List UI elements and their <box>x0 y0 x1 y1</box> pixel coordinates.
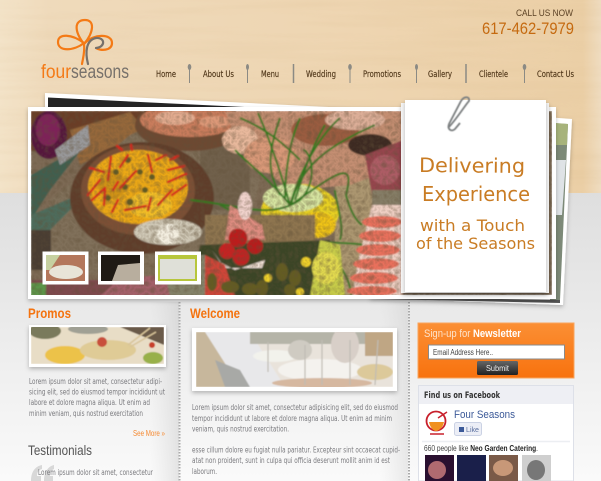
card slogan: Delivering <box>419 153 525 178</box>
panel: welcome <box>190 305 400 476</box>
welcome photo <box>192 327 397 391</box>
welcome text: Lorem ipsum dolor sit amet, consectetur adipisicing elit, sed do eiusmod <box>192 402 398 412</box>
shrimp bowl <box>134 111 236 152</box>
note card <box>401 97 549 293</box>
navigation menu: Home <box>156 69 176 79</box>
welcome text: esse cillum dolore eu fugiat nulla pariatur. Excepteur sint occaecat cupid- <box>192 444 400 454</box>
panel: facebook <box>418 386 574 481</box>
panel: promos <box>28 305 166 438</box>
burlap and table <box>31 111 144 152</box>
phone contact <box>482 8 574 38</box>
email input <box>428 345 564 359</box>
panel: testimonials <box>28 442 153 481</box>
navigation menu: Clientele <box>479 69 508 79</box>
shrimp platter <box>225 111 402 190</box>
card slogan <box>416 153 535 253</box>
promo photo <box>29 323 166 367</box>
welcome text <box>192 402 400 476</box>
navigation menu: Contact Us <box>537 69 574 79</box>
navigation menu: Promotions <box>363 69 401 79</box>
flowers and leaves <box>31 111 67 159</box>
promo text <box>29 376 166 418</box>
welcome text: veniam, quis nostrud exercitation. <box>192 424 289 434</box>
promo text: labore et dolore magna aliqua. Ut enim ad <box>29 397 150 407</box>
card slogan: with a Touch <box>420 216 525 235</box>
card slogan: of the Seasons <box>416 234 535 253</box>
brand name: four <box>41 62 72 83</box>
card slogan: Experience <box>422 182 530 206</box>
see more link: See More » <box>133 428 165 438</box>
welcome text: laborum. <box>192 466 217 476</box>
heading: welcome: Welcome <box>190 305 240 321</box>
testimonial text: Lorem ipsum dolor sit amet, consectetur <box>38 467 153 477</box>
like button: Like <box>466 425 479 434</box>
facebook heading: Find us on Facebook <box>424 390 500 400</box>
promo text: Lorem ipsum dolor sit amet, consectetur adipi- <box>29 376 162 386</box>
navigation menu: Gallery <box>428 69 452 79</box>
olive and mango plate <box>70 142 214 254</box>
navigation menu: Wedding <box>306 69 336 79</box>
promo text: sicing elit, sed do eiusmod tempor incididunt ut <box>29 386 166 396</box>
hero back photos <box>45 93 572 305</box>
salmon platter <box>352 205 403 296</box>
heading: promos: Promos <box>28 305 71 321</box>
chives <box>190 112 376 295</box>
promo text: minim veniam, quis nostrud exercitation <box>29 408 143 418</box>
panel: newsletter <box>418 323 574 378</box>
fan count: 660 people like Neo Garden Catering. <box>424 444 538 453</box>
submit button: Submit <box>486 363 510 373</box>
icon: paper clip <box>448 97 469 130</box>
navigation menu: About Us <box>203 69 234 79</box>
phone contact: CALL US NOW <box>516 8 573 18</box>
submit button <box>477 361 518 375</box>
icon: quote mark <box>31 465 54 481</box>
like button <box>454 422 482 436</box>
hero main photo <box>28 99 556 300</box>
page name: Four Seasons <box>454 409 515 421</box>
newsletter heading: Sign-up for Newsletter <box>424 328 522 340</box>
fan photos <box>425 455 551 481</box>
navigation menu: Menu <box>261 69 279 79</box>
logo: seasons <box>71 62 129 83</box>
welcome text: atat non proident, sunt in culpa qui officia deserunt mollit anim id est <box>192 455 391 465</box>
navigation menu <box>156 64 574 83</box>
phone contact: 617-462-7979 <box>482 20 574 38</box>
cured meats <box>365 140 403 195</box>
green garnish and tomatoes <box>204 214 316 245</box>
thumbnails <box>42 252 201 284</box>
email input: Email Address Here.. <box>433 348 493 357</box>
icon: catering logo <box>426 412 447 434</box>
heading: testimonials: Testimonials <box>28 442 92 458</box>
welcome text: tempor incididunt ut labore et dolore magna aliqua. Ut enim ad minim <box>192 413 392 423</box>
logo <box>41 20 129 83</box>
melon <box>260 183 340 223</box>
